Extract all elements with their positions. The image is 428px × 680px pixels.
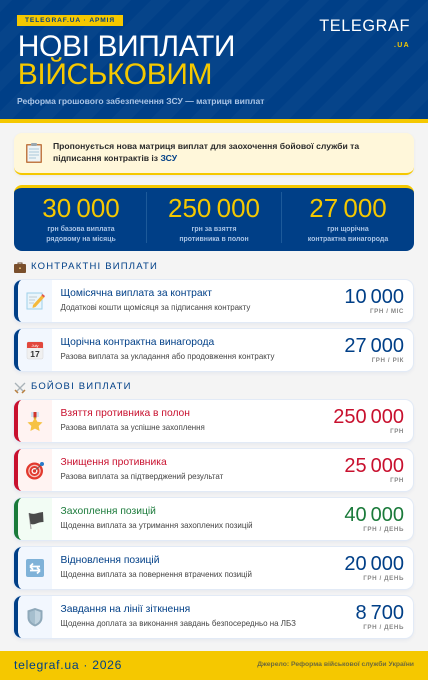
unit: ГРН / ДЕНЬ — [363, 526, 404, 532]
description: Разова виплата за підтверджений результат — [60, 472, 223, 480]
unit: ГРН / ДЕНЬ — [363, 574, 404, 582]
amount: 40 000 — [344, 504, 404, 526]
amount: 10 000 — [344, 286, 404, 308]
description: Разова виплата за успішне захоплення — [60, 422, 205, 432]
panel: key figures — [14, 185, 414, 251]
header banner — [0, 0, 428, 123]
icon: calendar: July — [31, 343, 39, 348]
card: contact line missions — [14, 596, 413, 638]
title: Взяття противника в полон — [60, 408, 190, 418]
icon: memo and pencil — [18, 280, 52, 322]
amount: 8 700 — [356, 602, 404, 624]
card: seizing positions — [14, 498, 413, 540]
callout text — [53, 141, 360, 163]
description: Додаткові кошти щомісяця за підписання контракту — [60, 302, 250, 312]
description: Щоденна виплата за утримання захоплених позицій — [60, 520, 253, 530]
callout: intro note — [14, 133, 414, 175]
icon: calendar: 17 — [30, 349, 40, 359]
icon: calendar — [18, 329, 52, 371]
amount: 25 000 — [344, 455, 404, 477]
amount: 250 000 — [333, 406, 404, 428]
title line one: НОВІ ВИПЛАТИ — [18, 30, 235, 63]
card: capturing the enemy — [14, 400, 413, 442]
amount: 20 000 — [344, 553, 404, 575]
unit: ГРН — [390, 428, 404, 434]
icon: clipboard — [26, 143, 42, 163]
callout text: підписання контрактів із ЗСУ — [53, 153, 177, 163]
unit: ГРН / ДЕНЬ — [363, 624, 404, 630]
stat: capture — [168, 193, 260, 242]
card: monthly contract payment — [14, 280, 413, 322]
subtitle: Реформа грошового забезпечення ЗСУ — матриця виплат — [17, 96, 264, 106]
category tag — [17, 15, 123, 26]
stat: base pay — [42, 193, 120, 242]
icon: black flag — [18, 498, 52, 540]
unit: ГРН / РІК — [372, 356, 404, 364]
icon: target — [18, 449, 52, 491]
icon: briefcase — [14, 262, 26, 273]
logo: TELEGRAF — [319, 17, 410, 35]
stat: annual bonus — [308, 193, 388, 242]
unit: ГРН / МІС — [370, 308, 404, 314]
section heading: combat payments: БОЙОВІ ВИПЛАТИ — [31, 381, 132, 392]
card: annual contract bonus — [14, 329, 413, 371]
title: Щомісячна виплата за контракт — [60, 288, 212, 298]
title: Щорічна контрактна винагорода — [60, 336, 214, 348]
description: Разова виплата за укладання або продовження контракту — [60, 352, 274, 360]
callout text: Пропонується нова матриця виплат для заохочення бойової служби та — [53, 141, 359, 151]
amount: 27 000 — [344, 335, 404, 357]
unit: ГРН — [390, 476, 404, 484]
stat: capture: грн за взяття — [192, 226, 236, 233]
stat: capture: 250 000 — [168, 193, 260, 223]
icon: medal — [18, 400, 52, 442]
section heading: contract payments: КОНТРАКТНІ ВИПЛАТИ — [31, 261, 158, 272]
title: Захоплення позицій — [60, 506, 156, 516]
description: Щоденна доплата за виконання завдань безпосередньо на ЛБЗ — [60, 618, 296, 628]
stat: base pay: 30 000 — [42, 193, 120, 223]
title: Завдання на лінії зіткнення — [60, 604, 190, 614]
stat: annual bonus: 27 000 — [309, 193, 387, 223]
description: Щоденна виплата за повернення втрачених позицій — [60, 570, 252, 578]
category tag: TELEGRAF.UA · АРМІЯ — [25, 17, 115, 24]
stat: base pay: рядовому на місяць — [46, 236, 116, 242]
footer brand: telegraf.ua · 2026 — [14, 658, 122, 672]
icon: shield — [18, 596, 52, 638]
footer bar — [0, 651, 428, 680]
icon: repeat arrows — [18, 547, 52, 589]
title: Знищення противника — [60, 456, 167, 468]
title line two: ВІЙСЬКОВИМ — [18, 58, 212, 91]
logo suffix: .UA — [394, 42, 410, 49]
source note: Джерело: Реформа військової служби України — [257, 661, 414, 668]
card: destroying the enemy — [14, 449, 413, 491]
stat: capture: противника в полон — [179, 236, 249, 242]
stat: annual bonus: контрактна винагорода — [308, 236, 388, 242]
stat: base pay: грн базова виплата — [47, 226, 115, 233]
stat: annual bonus: грн щорічна — [327, 226, 369, 233]
icon: crossed swords — [14, 382, 26, 394]
title: Відновлення позицій — [60, 554, 159, 566]
card: restoring positions — [14, 547, 413, 589]
